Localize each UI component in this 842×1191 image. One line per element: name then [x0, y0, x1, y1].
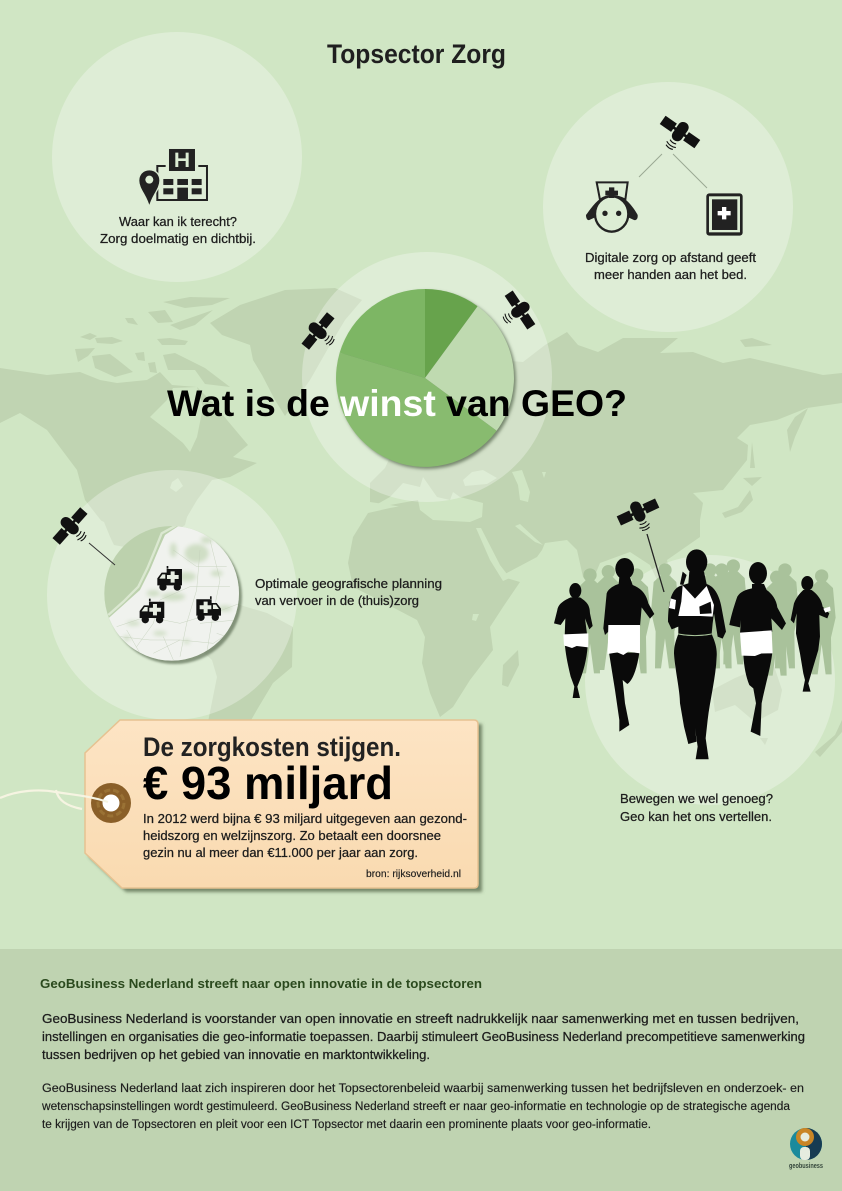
tag source: bron: rijksoverheid.nl	[366, 869, 461, 880]
logo	[789, 1128, 823, 1170]
price tag	[0, 720, 482, 892]
logo: geobusiness	[789, 1163, 823, 1170]
tag body text: In 2012 werd bijna € 93 miljard uitgegeven aan gezond-	[143, 812, 467, 826]
footer paragraph 1: GeoBusiness Nederland is voorstander van open innovatie en streeft nadrukkelijk naar samenwerking met en tussen bedrijven,	[42, 1012, 799, 1026]
line: satellite to map	[89, 543, 115, 565]
panel circle: transport	[47, 470, 297, 720]
eyelet	[91, 783, 131, 823]
seas	[100, 387, 546, 621]
North America	[0, 368, 257, 548]
tag body	[85, 720, 478, 888]
icon: nurse	[586, 182, 638, 232]
caption: digital care	[585, 251, 757, 282]
caption: transport: Optimale geografische planning	[255, 577, 442, 591]
Eurasia	[370, 332, 842, 615]
pie chart	[336, 289, 516, 469]
footer heading: GeoBusiness Nederland streeft naar open innovatie in de topsectoren	[40, 976, 482, 991]
caption: hospital	[100, 215, 256, 246]
caption: hospital: Waar kan ik terecht?	[119, 215, 237, 229]
Arctic islands	[75, 297, 230, 415]
icon: satellite left	[48, 503, 98, 554]
tag amount: € 93 miljard	[143, 757, 393, 809]
tag body text: gezin nu al meer dan €11.000 per jaar aan zorg.	[143, 846, 418, 860]
South America	[190, 605, 293, 722]
caption: transport	[255, 577, 442, 608]
runners	[554, 549, 836, 759]
footer paragraph 2: te krijgen van de Topsectoren en pleit voor een ICT Topsector met daarin een prominente plaats voor geo-informatie.	[42, 1119, 651, 1131]
icon: satellite centre right	[493, 287, 540, 337]
tag heading: De zorgkosten stijgen.	[143, 732, 401, 762]
icon: satellite top right	[652, 111, 704, 160]
panel circle: digital care	[543, 82, 793, 332]
icon: ambulance right	[196, 596, 221, 621]
Madagascar	[502, 650, 519, 687]
caption: digital care: Digitale zorg op afstand geeft	[585, 251, 757, 265]
ghost crowd	[576, 559, 836, 676]
footer paragraph 2	[41, 1083, 804, 1131]
title: Topsector Zorg	[327, 39, 506, 69]
caption: exercise: Geo kan het ons vertellen.	[620, 810, 772, 824]
caption: digital care: meer handen aan het bed.	[594, 268, 747, 282]
Australia	[712, 660, 782, 722]
caption: exercise: Bewegen we wel genoeg?	[620, 792, 773, 806]
icon: ambulance top	[157, 566, 182, 591]
icon: hospital with pin	[139, 149, 207, 208]
tag body text	[143, 812, 467, 860]
footer paragraph 1: instellingen en organisaties die geo-informatie toepassen. Daarbij stimuleert GeoBusiness Nederland precompetitieve samenwerking	[42, 1030, 805, 1044]
string	[0, 790, 108, 809]
footer paragraph 2: GeoBusiness Nederland laat zich inspireren door het Topsectorenbeleid waarbij samenwerking tussen het bedrijfsleven en onderzoek- en	[42, 1083, 804, 1095]
Japan and islands	[722, 338, 808, 518]
runner far right	[791, 576, 831, 692]
panel circle: exercise	[585, 555, 835, 805]
connector lines	[639, 154, 707, 188]
runner far left	[554, 583, 593, 698]
tag shadow	[89, 724, 482, 892]
panel circle: hospital	[52, 32, 302, 282]
panel circle: central	[302, 252, 552, 502]
icon: satellite runners	[614, 493, 665, 538]
caption: transport: van vervoer in de (thuis)zorg	[255, 594, 419, 608]
main heading: Wat is de winst van GEO?	[167, 383, 627, 424]
Africa	[348, 503, 520, 717]
icon: tablet	[706, 193, 743, 236]
footer band	[0, 949, 842, 1191]
line: satellite to runner	[647, 534, 664, 592]
icon: satellite centre left	[297, 309, 345, 358]
caption: hospital: Zorg doelmatig en dichtbij.	[100, 232, 256, 246]
Greenland	[210, 288, 362, 416]
runner second left	[603, 558, 654, 732]
tag body text: heidszorg en welzijnszorg. Zo betaalt een doorsnee	[143, 829, 441, 843]
runner second right	[729, 562, 786, 736]
caption: exercise	[620, 792, 773, 824]
footer paragraph 1: tussen bedrijven op het gebied van innovatie en marktontwikkeling.	[42, 1048, 430, 1062]
runner centre	[668, 549, 726, 759]
icon: ambulance left	[140, 599, 164, 623]
footer paragraph 1	[42, 1012, 805, 1062]
footer paragraph 2: wetenschapsinstellingen wordt gestimuleerd. GeoBusiness Nederland streeft er naar geo-informatie en technologie op de strategische agenda	[41, 1101, 791, 1113]
world map	[0, 288, 842, 757]
map circle: Netherlands	[103, 523, 247, 667]
